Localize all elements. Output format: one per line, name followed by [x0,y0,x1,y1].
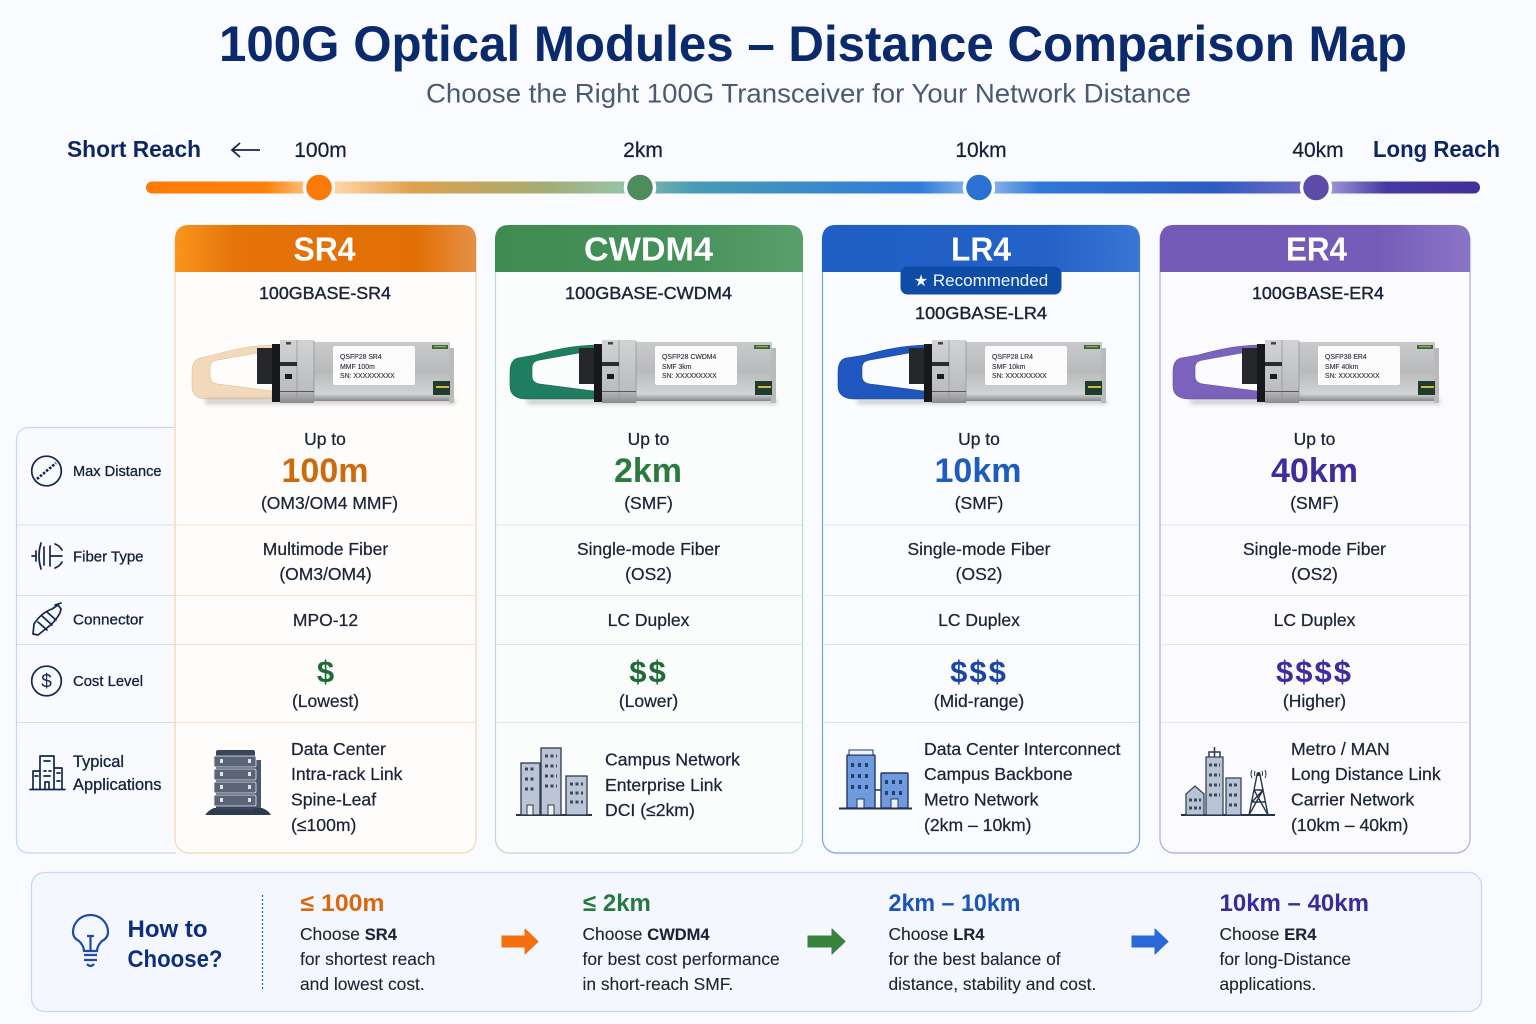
guidance: LR4: distance, stability and cost. [888,974,1096,994]
connector value: LC Duplex [1274,610,1356,630]
applications text: Data Center [291,739,386,759]
guidance: ER4: applications. [1220,974,1316,994]
guidance: ER4: for long-Distance [1220,949,1351,969]
module: CWDM4: SN: XXXXXXXXX [662,373,717,380]
header: LR4: LR4 [951,230,1012,268]
label: typical applications: Applications [73,776,162,794]
applications text: Spine-Leaf [291,790,376,810]
model name: 100GBASE-SR4 [259,283,391,303]
arrow: orange [502,929,538,954]
max distance value: 40km [1271,452,1358,490]
header: ER4 [1160,225,1470,272]
header: CWDM4 [495,225,803,272]
panel: how to choose [32,872,1482,1012]
max distance value: Up to [304,429,346,449]
icon: cost level: $ [41,672,52,692]
fiber type value: Single-mode Fiber [577,539,720,559]
applications text: Long Distance Link [1291,764,1441,784]
fiber type value [1243,539,1386,584]
fiber type value: (OS2) [1291,564,1338,584]
header: CWDM4: CWDM4 [584,230,714,268]
cost value: $$$ [950,654,1008,689]
applications text: Enterprise Link [605,775,723,795]
fiber type value [908,539,1051,584]
guidance: ER4: 10km – 40km [1220,890,1369,917]
icon: connected buildings [839,750,912,808]
applications text: Campus Backbone [924,764,1073,784]
applications text: Metro Network [924,790,1039,810]
module: ER4 [1173,340,1440,404]
icon: applications [30,756,65,790]
connector value: MPO-12 [293,610,358,630]
applications text: Campus Network [605,750,740,770]
fiber type value: (OS2) [625,564,672,584]
header: LR4 [822,225,1140,272]
max distance value: (SMF) [1290,493,1339,513]
guidance: LR4 [888,890,1096,994]
applications text [605,750,740,820]
panel: row labels [16,428,176,853]
gradient bar [146,182,1480,194]
guidance: CWDM4: ≤ 2km [583,890,651,917]
panel: LR4 [822,225,1140,853]
cost value: $$$$ [1276,654,1353,689]
panel: ER4 [1160,225,1470,853]
label: short reach: Short Reach [67,136,201,162]
max distance value [1271,429,1358,513]
guidance: SR4: for shortest reach [300,949,435,969]
fiber type value: Single-mode Fiber [908,539,1051,559]
fiber type value: Multimode Fiber [263,539,388,559]
badge: recommended: ★ Recommended [914,271,1048,290]
module: SR4: MMF 100m [340,364,375,371]
applications text: (10km – 40km) [1291,815,1408,835]
header: SR4 [175,225,476,272]
guidance: SR4: Choose SR4 [300,924,398,944]
model name: 100GBASE-ER4 [1252,283,1384,303]
module: SR4: SN: XXXXXXXXX [340,373,395,380]
distance labels: 10km [955,139,1007,162]
cost value [619,654,678,711]
max distance value: 100m [282,452,368,490]
cost value: (Higher) [1283,691,1346,711]
module: LR4: QSFP28 LR4 [992,354,1033,361]
distance labels: 100m [294,139,347,162]
label: typical applications: Typical [73,753,124,771]
module: CWDM4 [510,340,777,404]
header: ER4: ER4 [1286,230,1348,268]
cost value: $$ [629,654,668,689]
label: max distance: Max Distance [73,464,162,480]
arrow: blue [1132,929,1168,954]
guidance: CWDM4: Choose CWDM4 [582,924,710,944]
max distance value: Up to [958,429,1000,449]
module: CWDM4: SMF 3km [662,364,692,371]
cost value [934,654,1024,711]
max distance value: (SMF) [955,493,1003,513]
badge: recommended [900,266,1062,294]
icon: server rack [205,750,271,815]
guidance: ER4: Choose ER4 [1220,924,1317,944]
guidance: CWDM4: in short-reach SMF. [582,974,733,994]
panel: SR4 [175,225,476,853]
model name: 100GBASE-LR4 [915,303,1047,323]
icon: connector [33,603,61,635]
max distance value: Up to [1294,429,1335,449]
applications text [924,739,1121,835]
max distance value: (OM3/OM4 MMF) [261,493,398,513]
fiber type value: (OS2) [956,564,1002,584]
connector value: LC Duplex [938,610,1020,630]
label: connector: Connector [73,612,144,628]
guidance: LR4: Choose LR4 [888,924,985,944]
cost value: (Lower) [619,691,678,711]
icon: cost level [32,666,61,696]
title: 100G Optical Modules – Distance Comparison Map [219,16,1407,72]
applications text: (2km – 10km) [924,815,1032,835]
label: typical applications [73,753,162,794]
max distance value [935,429,1021,513]
distance labels [294,139,1344,162]
guidance: CWDM4: for best cost performance [582,949,780,969]
applications text [1291,739,1441,835]
applications text: Metro / MAN [1291,739,1390,759]
applications text: Carrier Network [1291,790,1414,810]
max distance value: Up to [628,429,669,449]
cost value: (Lowest) [292,691,359,711]
panel: CWDM4 [495,225,803,853]
module: LR4 [838,340,1107,404]
cost value [292,654,359,711]
guidance: LR4: 2km – 10km [888,890,1020,917]
max distance value: (SMF) [624,493,673,513]
guidance: SR4: and lowest cost. [300,974,425,994]
max distance value [261,429,398,513]
guidance: SR4 [300,890,435,994]
applications text [291,739,403,835]
icon: max distance [32,456,61,486]
model name: 100GBASE-CWDM4 [565,283,732,303]
subtitle: Choose the Right 100G Transceiver for Your Network Distance [426,78,1191,108]
markers [304,173,1330,202]
module: ER4: SN: XXXXXXXXX [1325,373,1380,380]
cost value [1276,654,1353,711]
module: SR4 [192,340,455,404]
module: LR4: SN: XXXXXXXXX [992,373,1047,380]
max distance value [614,429,682,513]
applications text: Data Center Interconnect [924,739,1121,759]
heading: how to choose [128,916,222,973]
max distance value: 10km [935,452,1021,490]
icon: light bulb [73,915,108,966]
guidance: SR4: ≤ 100m [300,890,384,917]
module: ER4: SMF 40km [1325,364,1359,371]
arrow: left [232,143,260,157]
icon: campus buildings [516,748,592,815]
connector value: LC Duplex [608,610,690,630]
fiber type value: (OM3/OM4) [279,564,372,584]
module: ER4: QSFP38 ER4 [1325,354,1367,361]
guidance: CWDM4 [582,890,780,994]
module: CWDM4: QSFP28 CWDM4 [662,354,717,361]
guidance: ER4 [1220,890,1369,994]
header: SR4: SR4 [294,230,356,268]
applications text: DCI (≤2km) [605,800,695,820]
heading: how to choose: How to [128,916,208,943]
fiber type value: Single-mode Fiber [1243,539,1386,559]
guidance: LR4: for the best balance of [888,949,1061,969]
module: LR4: SMF 10km [992,364,1026,371]
cost value: $ [317,654,334,689]
cost value: (Mid-range) [934,691,1024,711]
arrow: green [808,929,845,954]
fiber type value [577,539,720,584]
applications text: (≤100m) [291,815,356,835]
heading: how to choose: Choose? [128,946,222,973]
distance timeline [67,136,1500,202]
label: fiber type: Fiber Type [73,550,144,566]
label: long reach: Long Reach [1373,136,1500,162]
distance labels: 2km [623,139,663,162]
max distance value: 2km [614,452,682,490]
distance labels: 40km [1292,139,1344,162]
label: cost level: Cost Level [73,674,143,690]
module: SR4: QSFP28 SR4 [340,354,382,361]
fiber type value [263,539,388,584]
applications text: Intra-rack Link [291,764,403,784]
icon: fiber type [32,543,62,569]
icon: metro skyline and tower [1181,747,1275,815]
